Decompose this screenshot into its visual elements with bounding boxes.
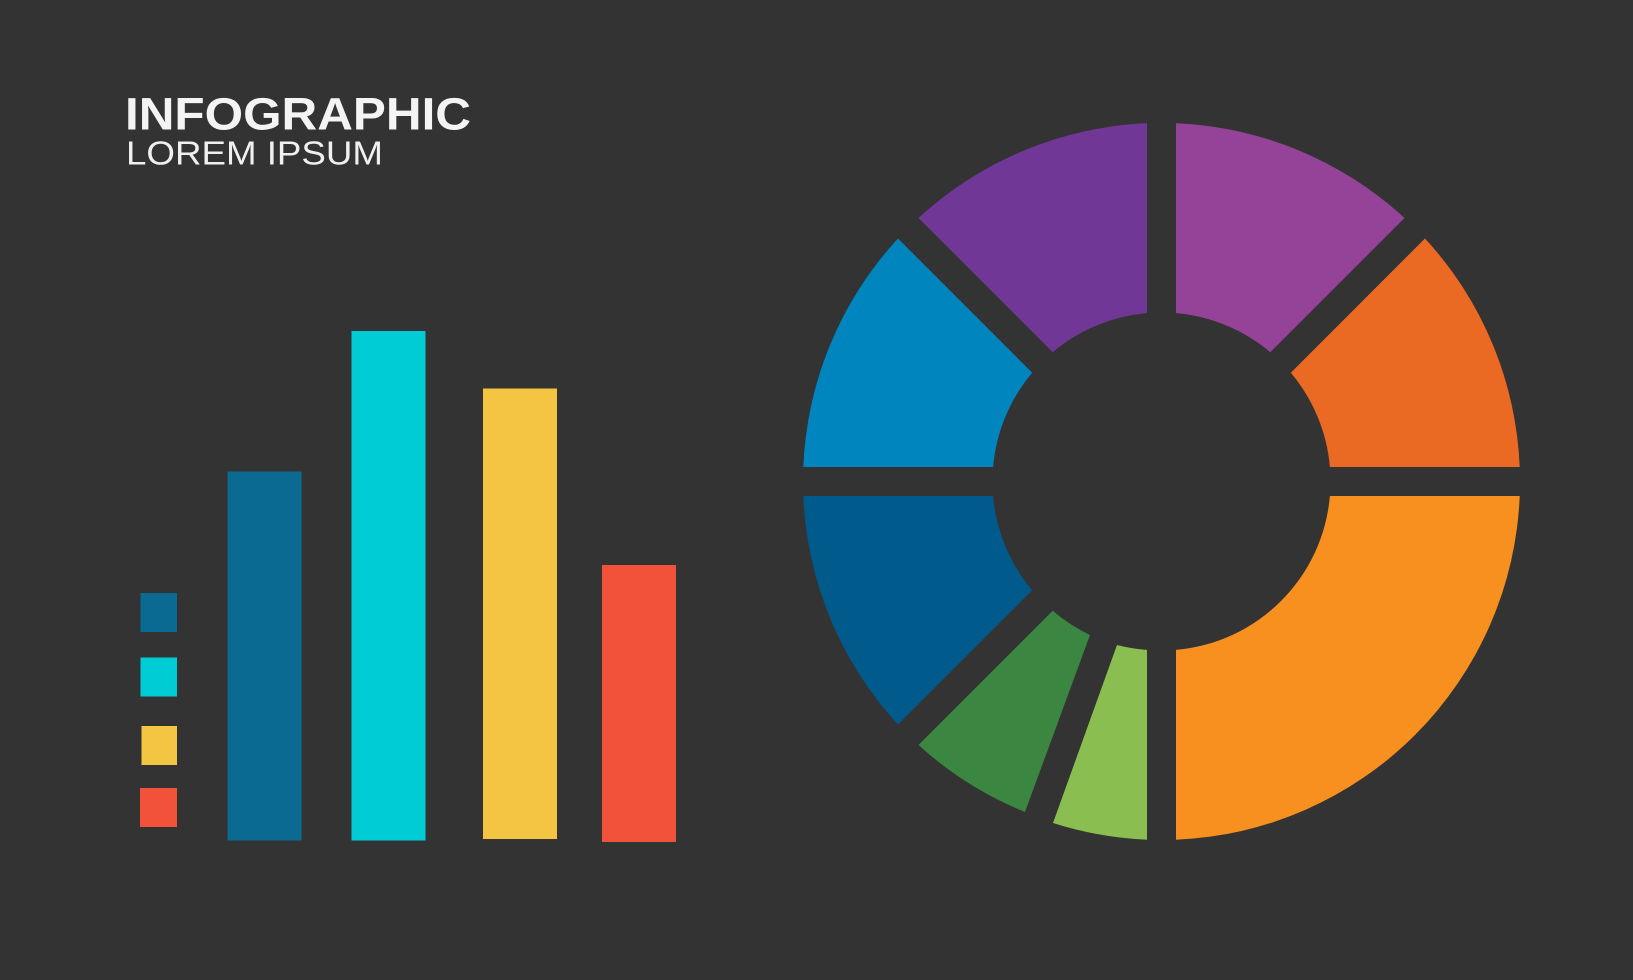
legend swatch: cyan <box>140 658 177 696</box>
segment: green <box>918 611 1090 812</box>
bar: red <box>602 565 676 842</box>
segment: light green <box>1053 645 1147 840</box>
bar: cyan <box>352 331 426 840</box>
donut chart <box>803 123 1520 840</box>
legend <box>140 593 177 827</box>
legend swatch: red <box>140 788 177 827</box>
bar: yellow <box>483 388 557 839</box>
segment: dark blue <box>803 496 1032 724</box>
segment: blue <box>803 238 1032 467</box>
legend swatch: dark blue <box>140 593 177 632</box>
segment: dark purple <box>918 123 1147 352</box>
segment: orange-red <box>1291 238 1520 467</box>
heading <box>125 88 471 172</box>
segment: large orange <box>1176 496 1520 840</box>
title: INFOGRAPHIC <box>125 88 471 140</box>
bar: dark blue <box>228 472 302 840</box>
subtitle: LOREM IPSUM <box>126 134 383 172</box>
legend swatch: yellow <box>142 726 177 765</box>
segment: purple <box>1176 123 1404 352</box>
bar chart <box>228 331 676 842</box>
